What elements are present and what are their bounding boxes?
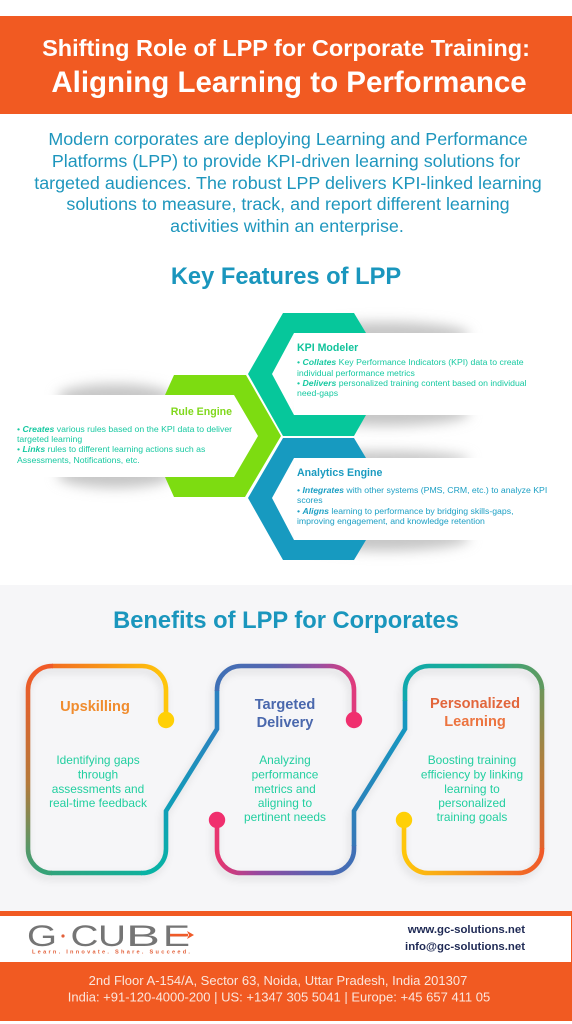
card: personalized learning (421, 696, 523, 824)
card: upskilling: real-time feedback (49, 796, 147, 810)
icon: pink dot two (209, 812, 225, 828)
hexagon: KPI Modeler: KPI Modeler (297, 342, 358, 354)
intro paragraph: Modern corporates are deploying Learning and Performance (48, 129, 528, 149)
hexagon: KPI Modeler: need-gaps (297, 388, 339, 398)
hexagon: Rule Engine: Rule Engine (171, 406, 232, 418)
hexagon: Analytics Engine: • Aligns learning to performance by bridging skills-gaps, (297, 506, 513, 516)
card: personalized learning: personalized (438, 796, 506, 810)
card: personalized learning: Boosting training (428, 753, 516, 767)
hexagon: Rule Engine (17, 375, 281, 497)
hexagon: KPI Modeler: individual performance metrics (297, 368, 415, 378)
logo: G-CUBE: E (163, 920, 190, 953)
hexagon: Rule Engine: targeted learning (17, 434, 82, 444)
card: upskilling: Upskilling (60, 699, 130, 715)
logo: G-CUBE: C (70, 920, 98, 953)
logo: G-CUBE (27, 920, 194, 956)
hexagon: Rule Engine: • Creates various rules based on the KPI data to deliver (17, 424, 232, 434)
hexagon: Rule Engine: Assessments, Notifications, etc. (17, 455, 140, 465)
card: targeted delivery: metrics and (254, 782, 316, 796)
icon: yellow dot (158, 712, 174, 728)
panel: benefit cards (26, 666, 542, 877)
heading: benefits: Benefits of LPP for Corporates (113, 608, 459, 634)
hexagon: KPI Modeler: • Collates Key Performance Indicators (KPI) data to create (297, 357, 524, 367)
intro paragraph: activities within an enterprise. (170, 216, 404, 236)
intro paragraph: Platforms (LPP) to provide KPI-driven learning solutions for (52, 151, 520, 171)
hexagon: Analytics Engine: improving engagement, and knowledge retention (297, 516, 485, 526)
logo: G-CUBE: G (27, 920, 57, 953)
hexagon: KPI Modeler: • Delivers personalized training content based on individual (297, 378, 527, 388)
panel: benefits background (0, 585, 572, 911)
card: upskilling: through (78, 768, 118, 782)
hexagon: Analytics Engine (248, 438, 547, 560)
connector line: card one to card two (28, 666, 354, 873)
card: targeted delivery: Analyzing (259, 753, 311, 767)
title banner: Shifting Role of LPP for Corporate Training: (42, 35, 530, 61)
card: targeted delivery: Delivery (257, 715, 314, 731)
footer address band (0, 962, 572, 1021)
icon: pink dot one (346, 712, 362, 728)
card: personalized learning: Personalized (430, 696, 520, 712)
connector line: card two to card three (217, 666, 542, 873)
panel: key features hexagons (0, 313, 572, 560)
title banner: Aligning Learning to Performance (51, 66, 527, 99)
card: personalized learning: training goals (437, 810, 507, 824)
card: personalized learning: efficiency by linking (421, 768, 523, 782)
card outline shadows (26, 670, 540, 877)
card: upskilling: Identifying gaps (56, 753, 140, 767)
hexagon shadows (57, 322, 470, 551)
intro paragraph: solutions to measure, track, and report different learning (66, 194, 510, 214)
hexagon: Analytics Engine: Analytics Engine (297, 467, 382, 479)
white bands masking shadows (0, 333, 572, 540)
intro paragraph (34, 129, 542, 236)
logo: G-CUBE: Learn. Innovate. Share. Succeed. (32, 950, 190, 956)
card: targeted delivery: Targeted (255, 697, 315, 713)
contact details (405, 924, 525, 953)
hexagon: Analytics Engine: • Integrates with other systems (PMS, CRM, etc.) to analyze KPI (297, 485, 547, 495)
card: targeted delivery: performance (252, 768, 319, 782)
hexagon: Analytics Engine: scores (297, 495, 323, 505)
card: targeted delivery (244, 697, 326, 824)
card: targeted delivery: aligning to (258, 796, 312, 810)
hexagon: Rule Engine: • Links rules to different learning actions such as (17, 444, 206, 454)
card: upskilling: assessments and (52, 782, 144, 796)
footer address band: 2nd Floor A-154/A, Sector 63, Noida, Uttar Pradesh, India 201307 (89, 973, 467, 988)
footer contact band (0, 911, 572, 962)
hexagon: KPI Modeler (248, 313, 527, 436)
logo: G-CUBE: U (98, 920, 126, 953)
card: personalized learning: Learning (444, 714, 506, 730)
footer address band: India: +91-120-4000-200 | US: +1347 305 5041 | Europe: +45 657 411 05 (68, 990, 490, 1004)
icon: yellow dot two (396, 812, 412, 828)
card: personalized learning: learning to (444, 782, 500, 796)
heading: key features: Key Features of LPP (171, 264, 401, 290)
intro paragraph: targeted audiences. The robust LPP delivers KPI-linked learning (34, 173, 542, 193)
card: targeted delivery: pertinent needs (244, 810, 326, 824)
logo: G-CUBE: B (126, 920, 160, 953)
title banner (0, 16, 572, 114)
contact details: www.gc-solutions.net (407, 924, 525, 936)
contact details: info@gc-solutions.net (405, 941, 525, 953)
card: upskilling (49, 699, 147, 810)
